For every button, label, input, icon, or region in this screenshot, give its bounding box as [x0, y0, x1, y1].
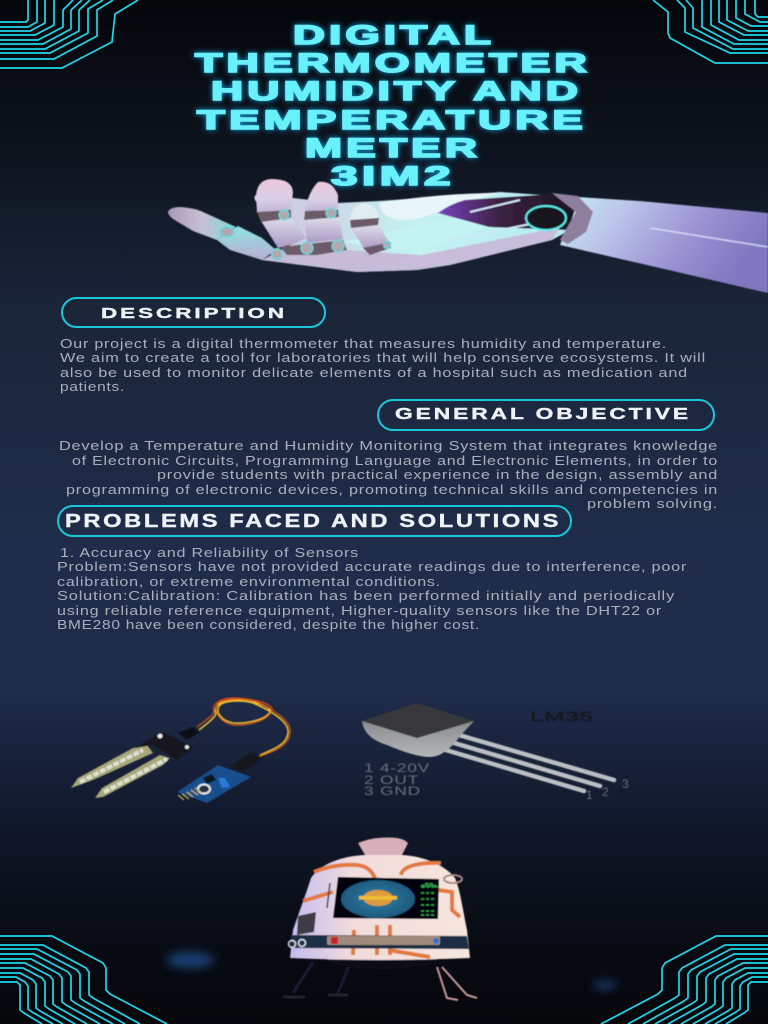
side window — [297, 912, 316, 935]
description text: Our project is a digital thermometer that measures humidity and temperature. — [60, 337, 667, 351]
circuit lines: top left — [0, 0, 138, 68]
problems and solutions text: Problem:Sensors have not provided accurate readings due to interference, poor — [57, 560, 687, 574]
pinout legend: 2 OUT — [364, 773, 419, 787]
title: THERMOMETER — [195, 48, 591, 78]
probe prongs — [71, 745, 153, 788]
left feet — [283, 995, 348, 997]
general objective text: of Electronic Circuits, Programming Language and Electronic Elements, in order to — [72, 454, 718, 468]
blue module — [177, 765, 251, 803]
lower blade — [359, 227, 560, 272]
title — [195, 20, 591, 191]
transistor body — [362, 721, 474, 757]
cyan joint rings — [220, 208, 390, 260]
cyan palm plate — [343, 212, 489, 250]
general objective text: problem solving. — [587, 497, 718, 511]
general objective heading pill: GENERAL OBJECTIVE — [395, 406, 691, 423]
index finger knob — [254, 194, 264, 202]
lower palm — [262, 250, 450, 272]
LM35 sensor diagram — [362, 703, 629, 802]
circuit lines: bottom right — [601, 936, 768, 1024]
wrist streaks — [452, 200, 540, 240]
description text: We aim to create a tool for laboratories that will help conserve ecosystems. It will — [60, 351, 706, 365]
screen readout — [421, 884, 437, 915]
index finger tip — [256, 179, 293, 213]
description text: patients. — [60, 380, 125, 394]
left legs — [293, 962, 350, 993]
title: TEMPERATURE — [197, 105, 587, 135]
thumb tip — [168, 207, 236, 240]
screen globe — [341, 880, 415, 918]
transistor top — [362, 703, 474, 738]
pin numbers: 2 — [602, 785, 609, 799]
screen — [333, 877, 439, 919]
connector — [178, 727, 200, 740]
pins — [429, 735, 614, 791]
module pins — [178, 788, 202, 800]
module chip — [203, 774, 216, 784]
ring finger tip — [350, 203, 379, 220]
title: HUMIDITY AND — [211, 76, 582, 106]
pin numbers: 1 — [586, 788, 593, 802]
index finger lower — [261, 217, 306, 248]
panel blue button — [433, 938, 439, 944]
forearm light streak — [650, 228, 768, 247]
circuit lines: bottom left — [0, 936, 167, 1024]
space capsule illustration — [283, 838, 477, 1000]
sensor board — [135, 732, 193, 760]
panel buttons — [331, 937, 338, 944]
middle finger tip — [305, 182, 338, 212]
board holes — [158, 734, 189, 749]
orange stripes — [303, 863, 460, 957]
pinout legend: 3 GND — [364, 784, 421, 798]
LM35 label: LM35 — [530, 709, 593, 724]
circuit lines: top right — [653, 0, 768, 63]
problems and solutions text: BME280 have been considered, despite the higher cost. — [57, 618, 480, 632]
second connector — [230, 753, 263, 772]
potentiometer — [218, 778, 230, 788]
module hole — [198, 784, 210, 794]
general objective text: provide students with practical experience in the design, assembly and — [157, 468, 718, 482]
problems heading pill — [58, 506, 571, 536]
middle finger lower — [304, 217, 343, 243]
problems and solutions text — [57, 546, 687, 632]
body — [290, 855, 470, 960]
finger joints — [257, 210, 391, 255]
description text: also be used to monitor delicate elements of a hospital such as medication and — [60, 366, 688, 380]
description text — [60, 337, 706, 394]
general objective text — [59, 439, 718, 511]
planet ring — [359, 896, 397, 900]
description heading pill — [62, 298, 325, 327]
side ring — [444, 875, 462, 883]
pinout legend: 1 4-20V — [364, 761, 430, 775]
pin numbers: 3 — [622, 777, 629, 791]
title: METER — [305, 133, 481, 163]
back of hand — [262, 192, 570, 272]
dark wrist — [438, 194, 576, 230]
wrist band — [552, 193, 593, 244]
problems and solutions text: using reliable reference equipment, Higher-quality sensors like the DHT22 or — [57, 604, 662, 618]
blue glow right — [593, 981, 617, 989]
title: DIGITAL — [293, 20, 495, 50]
side rod — [327, 883, 330, 908]
control panel — [327, 936, 440, 945]
thumb second segment — [217, 226, 276, 260]
blue glow left — [166, 952, 214, 968]
problems and solutions text: 1. Accuracy and Reliability of Sensors — [60, 546, 359, 560]
problems and solutions text: Solution:Calibration: Calibration has been performed initially and periodically — [57, 589, 675, 603]
general objective text: programming of electronic devices, promoting technical skills and competencies in — [66, 483, 718, 497]
pinout legend — [364, 761, 430, 798]
problems and solutions text: calibration, or extreme environmental conditions. — [57, 575, 441, 589]
prong silver traces — [80, 750, 167, 792]
soil moisture sensor — [71, 698, 290, 803]
general objective text: Develop a Temperature and Humidity Monitoring System that integrates knowledge — [59, 439, 718, 453]
ring finger lower — [351, 225, 390, 250]
general objective heading pill — [378, 400, 714, 430]
upper white plate — [379, 193, 501, 220]
right legs — [437, 967, 477, 1000]
wrist cyan ring — [526, 206, 566, 230]
forearm — [560, 197, 768, 293]
pin numbers — [586, 777, 629, 802]
problems heading pill: PROBLEMS FACED AND SOLUTIONS — [65, 511, 561, 531]
wires — [199, 700, 288, 755]
description heading pill: DESCRIPTION — [101, 305, 287, 322]
robotic hand illustration — [168, 179, 768, 293]
side hatch rings — [288, 940, 306, 948]
screen planet — [363, 890, 393, 906]
title: 3IM2 — [331, 161, 455, 191]
cap — [358, 838, 408, 855]
underside — [327, 951, 437, 969]
control band — [290, 935, 469, 949]
